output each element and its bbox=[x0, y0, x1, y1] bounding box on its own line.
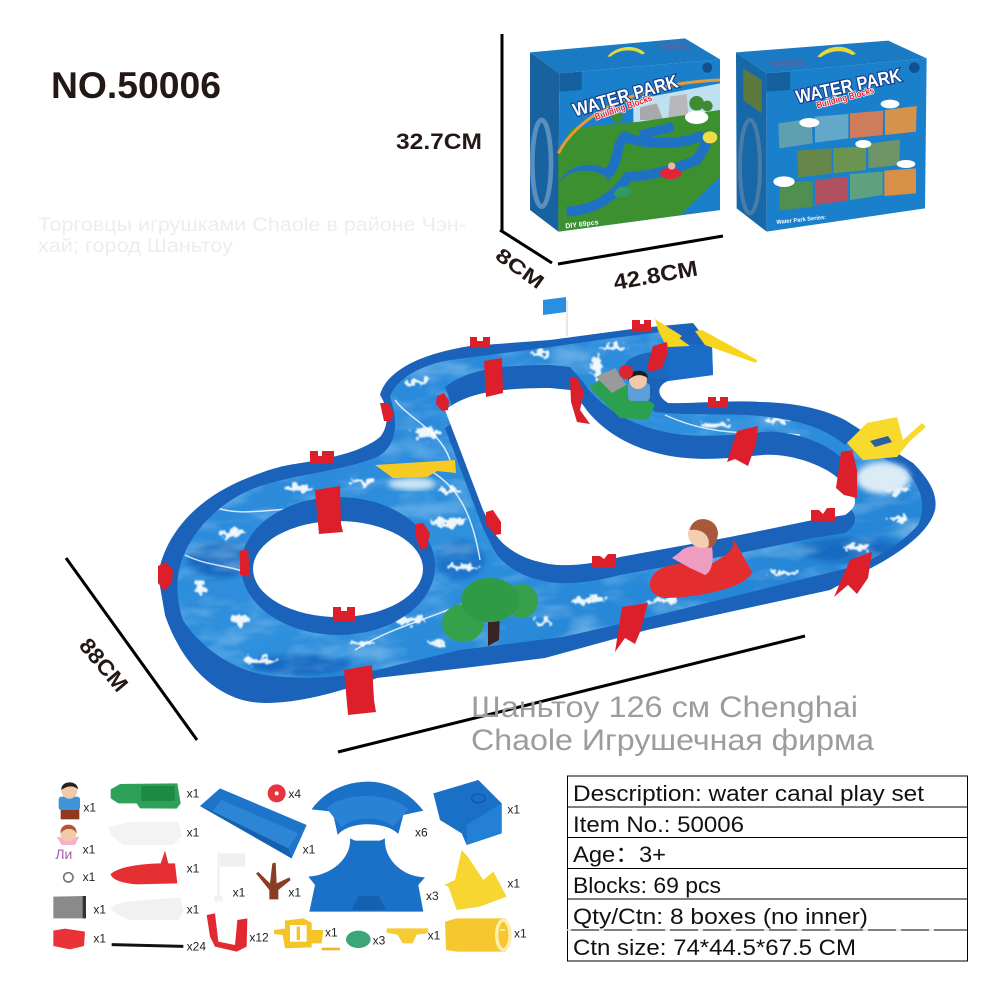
part: white hull bbox=[111, 897, 184, 920]
part: yellow crank bbox=[274, 918, 340, 950]
tree bbox=[442, 578, 538, 646]
dimension: box width bbox=[558, 236, 723, 295]
part quantities: x1 bbox=[83, 801, 96, 815]
watermark: top left: Торговцы игрушками Chaole в районе Чэн- bbox=[38, 215, 466, 236]
part quantities: x4 bbox=[288, 787, 301, 801]
part: green mound bbox=[346, 931, 371, 948]
flag on track bbox=[543, 297, 573, 350]
part quantities: x1 bbox=[288, 886, 301, 900]
part: grey block bbox=[53, 896, 86, 918]
track body bbox=[158, 323, 936, 703]
centre opening walls bbox=[445, 365, 855, 583]
part: T channel bbox=[308, 838, 425, 912]
part quantities: x1 bbox=[303, 842, 316, 856]
part quantities: x1 bbox=[233, 885, 246, 899]
ring opening bbox=[253, 521, 423, 617]
part: green boat bbox=[111, 783, 181, 809]
centre opening bbox=[445, 388, 855, 565]
ring opening wall bbox=[241, 497, 435, 635]
part: boy figure bbox=[59, 782, 80, 819]
dimension: box depth bbox=[491, 230, 552, 294]
part: ring bbox=[64, 873, 73, 882]
part quantities: x1 bbox=[514, 927, 527, 941]
watermark: top left: хай; город Шаньтоу bbox=[38, 236, 234, 257]
part quantities: x24 bbox=[187, 940, 206, 954]
part quantities: x1 bbox=[187, 902, 200, 916]
dimension: box height: 32.7CM bbox=[396, 129, 482, 154]
box: back of package: Water Park Series: bbox=[776, 215, 826, 226]
specification table: Item No.: 50006 bbox=[573, 812, 744, 837]
dimension: track depth bbox=[66, 558, 197, 740]
part quantities: x1 bbox=[93, 903, 106, 917]
box: back of package: WATER PARK bbox=[794, 64, 904, 107]
part: girl figure bbox=[57, 825, 79, 845]
yellow water wheel and spray bbox=[847, 417, 926, 494]
end block bbox=[668, 343, 713, 381]
dimension: track depth: 88CM bbox=[74, 633, 133, 697]
part quantities: x3 bbox=[426, 889, 439, 903]
dimension: box depth: 8CM bbox=[491, 244, 548, 294]
part: straight channel bbox=[200, 788, 307, 858]
part quantities: x1 bbox=[187, 825, 200, 839]
box: front of package bbox=[530, 38, 720, 232]
box: front of package: DIY 69pcs bbox=[565, 219, 599, 230]
part quantities: x1 bbox=[187, 786, 200, 800]
part quantities: x12 bbox=[249, 931, 269, 945]
part: red box bbox=[53, 929, 85, 949]
box: front of package: WATER PARK bbox=[570, 70, 681, 121]
part: yellow bucket bbox=[444, 850, 507, 910]
part: red clip bbox=[207, 913, 247, 952]
title: NO.50006 bbox=[51, 64, 221, 106]
part quantities: x3 bbox=[373, 933, 386, 947]
part: curved channel bbox=[312, 782, 423, 835]
part quantities: x1 bbox=[93, 931, 106, 945]
part quantities: x1 bbox=[83, 843, 96, 857]
part: branch bbox=[256, 863, 291, 899]
box: back of package bbox=[736, 41, 927, 232]
watermark: lower: Шаньтоу 126 см Chenghai bbox=[471, 691, 858, 724]
label: girl figure: Ли bbox=[55, 846, 72, 862]
girl in red boat bbox=[650, 519, 752, 598]
boy in green boat bbox=[589, 365, 655, 420]
watermark: lower: Chaole Игрушечная фирма bbox=[471, 724, 874, 757]
part quantities: x1 bbox=[428, 928, 441, 942]
part quantities bbox=[83, 786, 527, 954]
dimension: box width: 42.8CM bbox=[612, 256, 700, 295]
part: black rod bbox=[112, 945, 183, 946]
specification table bbox=[500, 776, 968, 961]
specification table: Blocks: 69 pcs bbox=[573, 873, 721, 898]
part quantities: x1 bbox=[507, 802, 520, 816]
water surface bbox=[177, 332, 922, 678]
watermark: lower bbox=[471, 691, 874, 757]
part quantities: x1 bbox=[507, 876, 520, 890]
box: back of package: Building Blocks bbox=[815, 85, 875, 110]
part quantities: x6 bbox=[415, 825, 428, 839]
specification table: Description: water canal play set bbox=[573, 781, 924, 806]
part quantities: x1 bbox=[187, 862, 200, 876]
watermark: top left bbox=[38, 215, 466, 257]
part quantities: x1 bbox=[83, 870, 96, 884]
part: yellow roller bbox=[445, 918, 511, 952]
part quantities: x1 bbox=[325, 926, 338, 940]
box: front of package: Building Blocks bbox=[593, 93, 653, 122]
specification table: Qty/Ctn: 8 boxes (no inner) bbox=[573, 904, 868, 929]
yellow gate and ramp bbox=[655, 319, 757, 363]
red clips bbox=[158, 320, 872, 715]
specification table: Age：3+ bbox=[573, 842, 666, 867]
part: white flag bbox=[214, 852, 245, 901]
water canal track bbox=[150, 320, 950, 703]
upper curved inner wall bbox=[625, 352, 668, 379]
part: white boat bbox=[108, 822, 182, 845]
yellow bridge bbox=[375, 460, 456, 490]
package parts list bbox=[53, 780, 527, 954]
part: red boat bbox=[111, 851, 177, 884]
part: yellow bar bbox=[387, 928, 428, 943]
dimension: track width bbox=[338, 636, 805, 752]
specification table: Ctn size: 74*44.5*67.5 CM bbox=[573, 935, 856, 960]
part: blue box bbox=[433, 780, 502, 845]
part: red button bbox=[268, 784, 286, 802]
